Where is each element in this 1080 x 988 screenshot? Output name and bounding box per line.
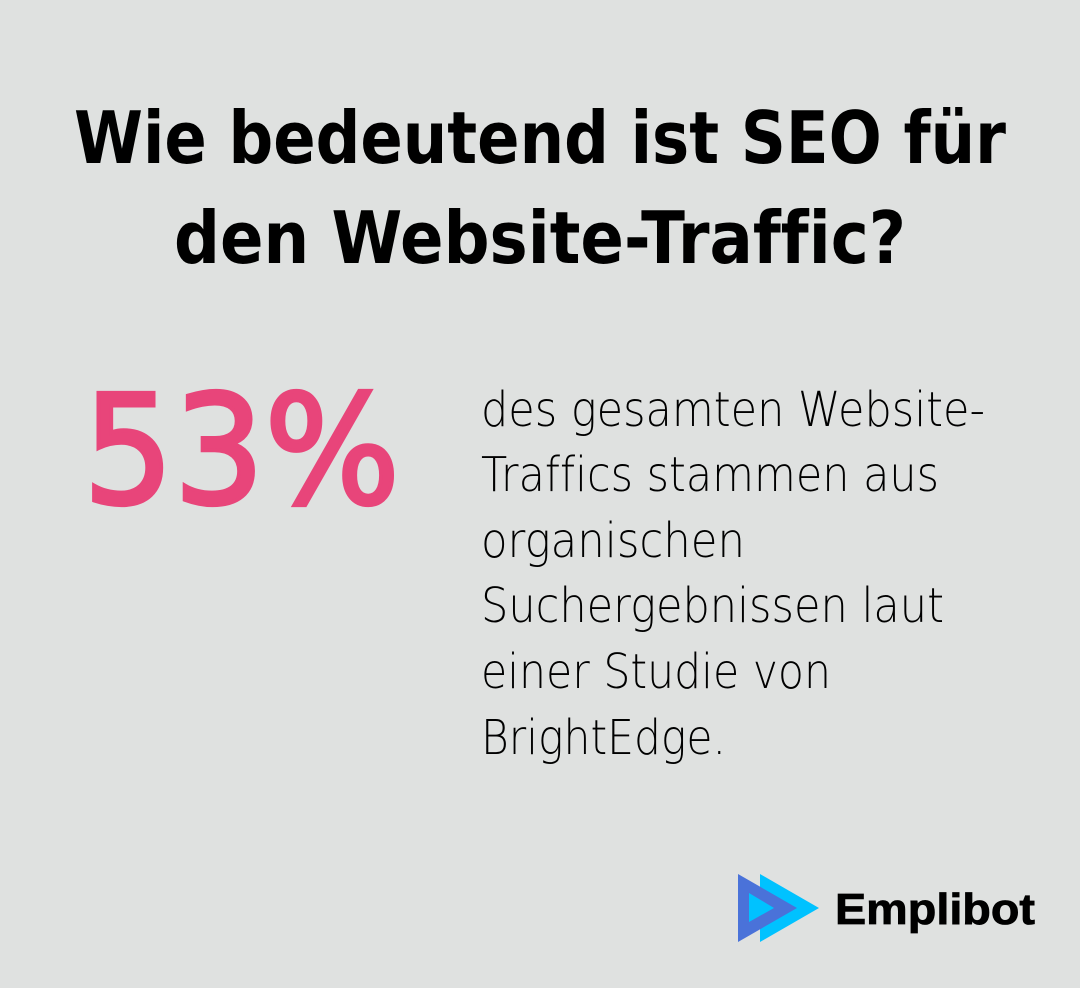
icon: play triangles <box>738 874 819 942</box>
big statistic: 53%: 53% <box>83 363 400 539</box>
description text: BrightEdge. <box>481 710 726 766</box>
title <box>74 96 1006 280</box>
logo: Emplibot <box>738 874 1035 942</box>
description text: des gesamten Website- <box>481 382 985 438</box>
title: den Website-Traffic? <box>174 196 906 280</box>
description text: Traffics stammen aus <box>481 447 939 503</box>
logo wordmark: Emplibot <box>835 885 1035 934</box>
description text: einer Studie von <box>481 644 831 700</box>
description text: Suchergebnissen laut <box>481 578 944 634</box>
description text: organischen <box>481 513 745 569</box>
description text <box>481 382 985 766</box>
